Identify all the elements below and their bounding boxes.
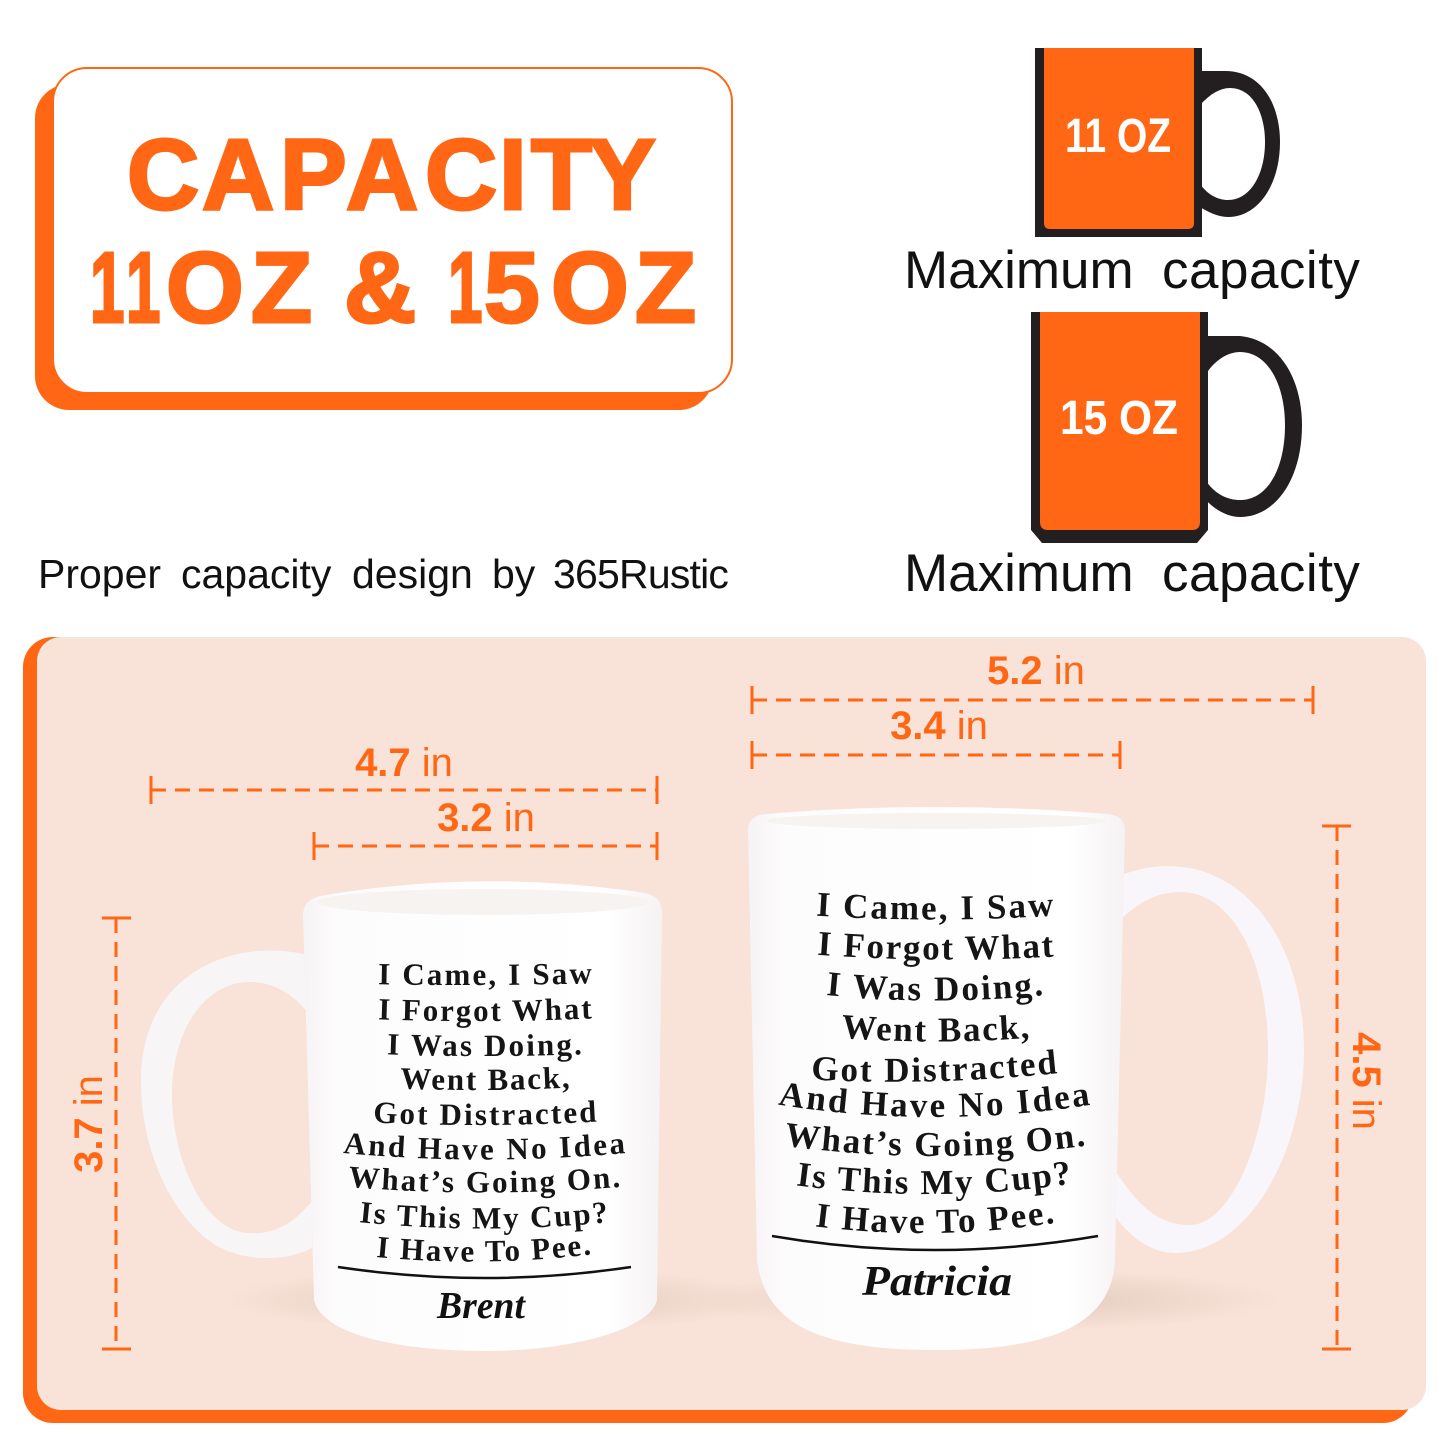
mug rim [317,889,649,915]
title: sizes: OZ [166,232,312,344]
mug quote: I Came, I Saw [817,892,1053,925]
mug quote: Is This My Cup? [360,1202,606,1235]
title: sizes [90,232,696,344]
title: sizes: 1 [448,232,482,344]
mug divider line [338,1267,631,1278]
mug quote: Went Back, [401,1067,569,1093]
dimension: 3.4 in [752,704,1120,769]
mug quote: Got Distracted [374,1100,596,1126]
label: 15 oz maximum capacity: Maximum [904,544,1148,603]
caption: proper capacity design: capacity [181,551,343,597]
icon: 11 oz mug: 11 OZ [1065,110,1171,163]
mug quote: I Forgot What [379,998,592,1028]
mug quote: And Have No Idea [778,1083,1090,1118]
dimension: 3.2 in [314,796,657,860]
mug quote: I Have To Pee. [377,1236,590,1262]
label: 11 oz maximum capacity: capacity [1162,241,1360,300]
dimension: 5.2 in: 5.2 in [987,649,1085,693]
mug quote: I Came, I Saw [379,964,592,990]
caption: proper capacity design: design [352,551,484,597]
mug divider line [772,1236,1098,1250]
mug quote: And Have No Idea [343,1133,626,1160]
title: sizes: & [344,232,416,344]
mug quote: Went Back, [842,1015,1028,1044]
mug: 15 oz photo [748,807,1304,1350]
mug quote: I Forgot What [818,932,1054,967]
dimension: 3.7 in: 3.7 in [67,1075,111,1173]
mug body [303,881,662,1351]
mug quote: Got Distracted [813,1049,1058,1082]
mug rim [766,813,1106,829]
dimension: 5.2 in [752,649,1313,714]
mug body [748,807,1125,1350]
mug quote: I Have To Pee. [816,1204,1054,1234]
label: 11 oz maximum capacity: Maximum [904,241,1148,300]
dimension: 3.2 in: 3.2 in [437,796,535,840]
title: sizes: 11 [90,232,160,344]
mug quote: What’s Going On. [787,1123,1084,1162]
icon: 15 oz mug [1031,312,1302,543]
mug handle [1108,866,1304,1253]
dimension: 4.7 in: 4.7 in [355,741,453,785]
mug quote: Is This My Cup? [797,1162,1068,1201]
icon: 15 oz mug: 15 OZ [1060,392,1178,445]
dimension: 3.4 in: 3.4 in [890,704,988,748]
dimension: 4.5 in [1322,826,1388,1349]
dimension: 4.5 in: 4.5 in [1344,1032,1388,1130]
mug name: Patricia [861,1259,1012,1305]
caption: proper capacity design: by [492,551,547,597]
title: sizes: 5OZ [484,232,696,344]
mug shadows [220,1268,1280,1332]
caption: proper capacity design: 365Rustic [553,551,728,597]
mug: 11 oz photo [141,881,662,1351]
panel: mug dimensions [23,637,1426,1423]
mug quote [343,964,626,1262]
mug quote: I Was Doing. [388,1034,581,1062]
dimension: 4.7 in [151,741,657,804]
mug quote: I Was Doing. [827,972,1042,1005]
dimension: 3.7 in [67,918,131,1349]
caption: proper capacity design: Proper [38,551,172,597]
title: capacity: CAPACITY [127,119,656,231]
icon: 11 oz mug [1035,48,1280,237]
mug name: Brent [436,1285,526,1327]
mug handle [141,950,312,1258]
label: 15 oz maximum capacity: capacity [1162,544,1360,603]
title card [35,68,732,410]
mug quote [778,892,1090,1234]
mug quote: What’s Going On. [350,1166,620,1198]
